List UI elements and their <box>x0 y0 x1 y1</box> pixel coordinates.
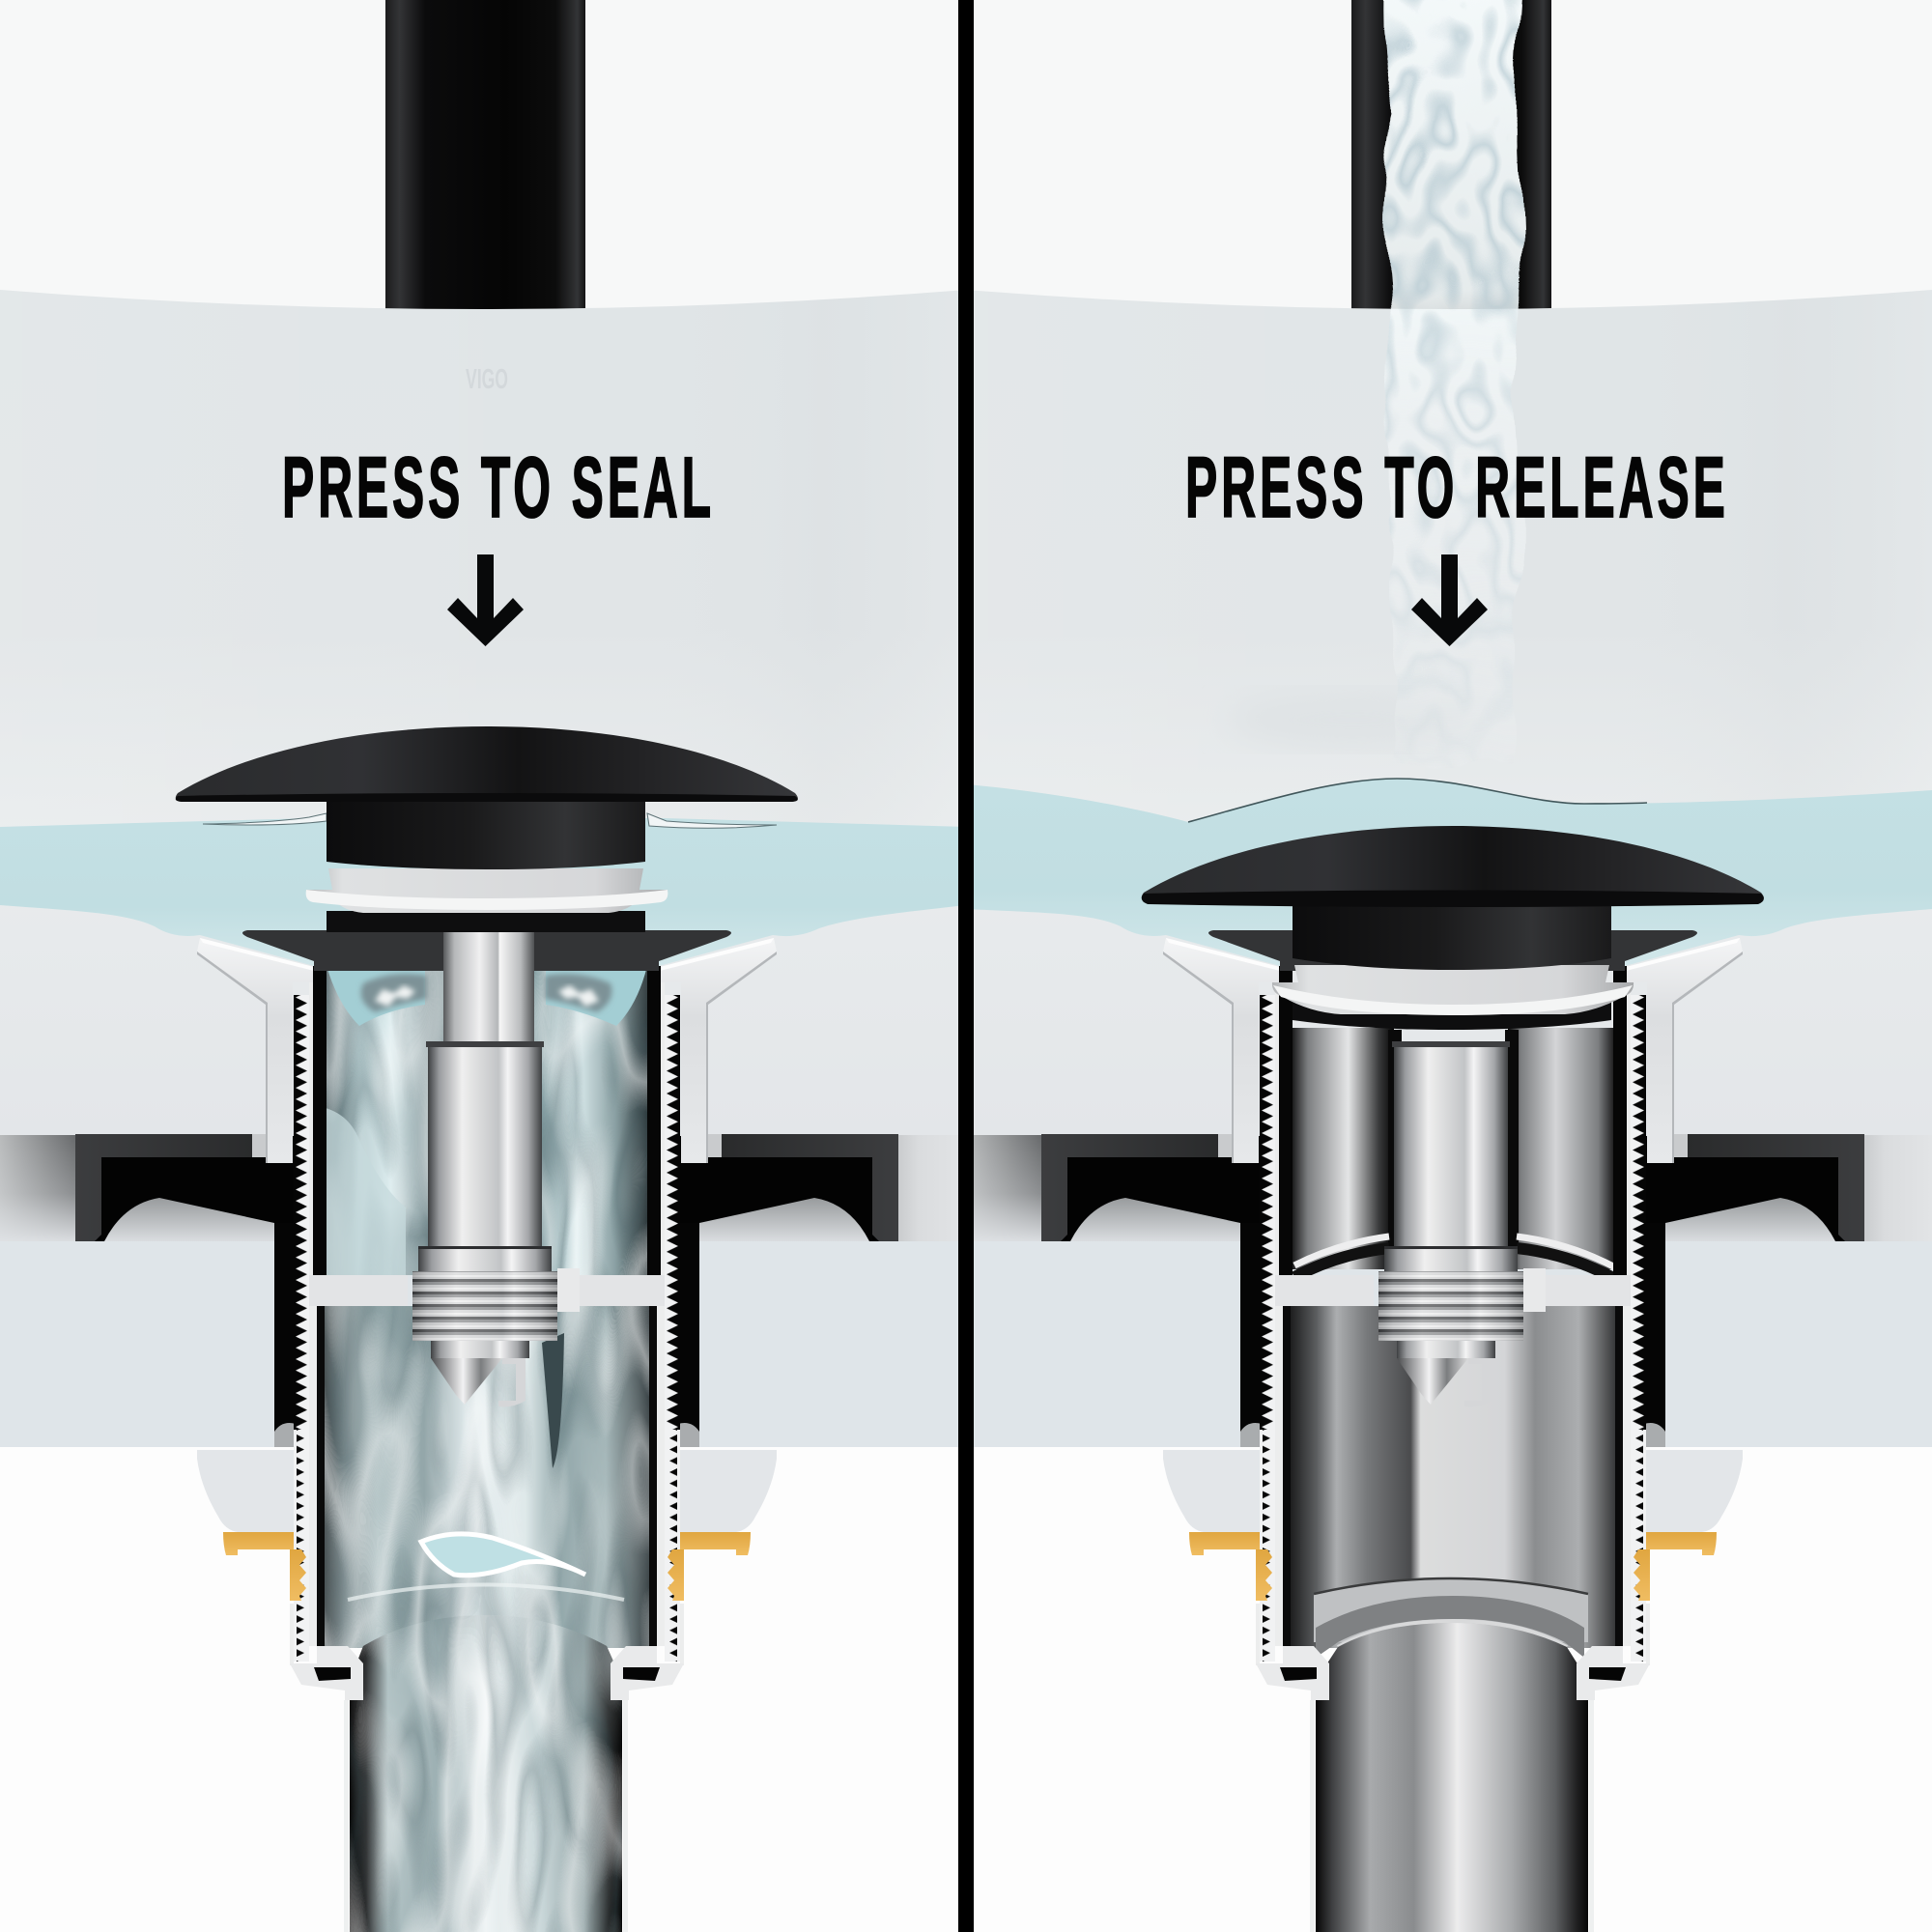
sleeve left <box>1388 1030 1402 1247</box>
pipe white outline left <box>1310 1700 1315 1932</box>
base white area <box>966 1447 1932 1932</box>
lower stem mechanism <box>412 1041 580 1406</box>
seal lip <box>306 890 668 910</box>
falling water stream <box>1381 0 1522 763</box>
foam left <box>375 985 415 1007</box>
heading: press to release: PRESS TO RELEASE <box>1185 440 1725 536</box>
background: upper white wall <box>0 0 966 309</box>
arrow: down to release <box>1411 554 1488 646</box>
counter band right <box>898 1135 958 1241</box>
housing right half <box>1532 938 1864 1700</box>
housing left half <box>75 938 408 1700</box>
upper chamber metal right <box>1508 1028 1614 1269</box>
panel: press to release (open drain) <box>966 0 1932 1932</box>
upper chamber metal left <box>1293 1028 1394 1269</box>
top chamber water highlight right <box>546 966 647 1026</box>
basin sheen <box>0 290 966 831</box>
pipe white outline right <box>623 1700 628 1932</box>
foam right <box>558 985 599 1007</box>
counter band left fade <box>966 1135 1043 1241</box>
rubber seal <box>306 868 668 913</box>
upper chamber draining water <box>327 966 647 1275</box>
lower chamber draining water <box>317 1306 653 1648</box>
upper stem rod <box>443 930 534 1044</box>
rubber seal <box>1272 965 1634 1014</box>
dark ring under seal <box>1293 995 1611 1030</box>
faucet pipe <box>385 0 585 319</box>
reducer ring band <box>1314 1578 1588 1642</box>
turbulent water patch <box>327 1109 406 1275</box>
stopper neck <box>1293 898 1611 970</box>
background: upper white wall <box>966 0 1932 309</box>
panel: press to seal (closed drain) <box>0 0 966 1932</box>
ledge left <box>1294 1236 1389 1265</box>
lower stem mechanism <box>1378 1041 1546 1406</box>
countertop lower block <box>966 1241 1932 1447</box>
pipe white outline left <box>344 1700 349 1932</box>
faucet pipe <box>1351 0 1551 319</box>
divider between panels <box>958 0 974 1932</box>
dark flange insert <box>242 930 731 971</box>
dark ring under seal <box>327 911 645 932</box>
cap rim <box>176 793 798 802</box>
water meniscus left <box>203 813 327 825</box>
water meniscus right <box>647 813 777 828</box>
reducer shoulder <box>1316 1596 1584 1658</box>
housing left half <box>1041 938 1374 1700</box>
swirl on the water <box>421 1534 585 1576</box>
ring lines in chamber <box>348 1584 624 1600</box>
counter band right <box>1860 1135 1932 1241</box>
heading: press to seal: PRESS TO SEAL <box>282 440 711 536</box>
ledge right <box>1517 1236 1615 1267</box>
reducer black rim <box>1338 1621 1567 1647</box>
reducer ring highlights <box>1314 1578 1588 1594</box>
pipe white outline right <box>1589 1700 1594 1932</box>
standing water <box>0 818 966 966</box>
soft splash shadow <box>1227 691 1478 749</box>
top chamber water highlight left <box>327 966 425 1026</box>
lower chamber metal <box>1283 1306 1619 1648</box>
dark flange insert <box>1208 930 1697 971</box>
brand mark: VIGO <box>466 364 508 395</box>
stopper neck <box>327 801 645 869</box>
ledge right shadow <box>1517 1248 1615 1279</box>
air pocket left <box>361 974 427 1012</box>
base white area <box>0 1447 966 1932</box>
counter band left <box>0 1135 77 1241</box>
ripple crest line <box>1188 779 1647 822</box>
arrow: down to seal <box>447 554 524 646</box>
cap rim <box>1142 891 1764 907</box>
ledge left shadow <box>1294 1248 1389 1277</box>
stopper cap <box>176 726 798 802</box>
counter band left <box>966 1135 1043 1241</box>
air pocket right <box>545 974 611 1012</box>
standing water with ripple <box>966 779 1932 966</box>
water crease <box>542 1333 564 1468</box>
sink basin <box>0 290 966 1136</box>
counter band left fade <box>0 1149 75 1241</box>
housing right half <box>566 938 898 1700</box>
drain pipe metal <box>1316 1623 1588 1932</box>
basin sheen <box>966 290 1932 831</box>
sink basin <box>966 290 1932 1136</box>
seal lip <box>1273 985 1633 1015</box>
stopper cap <box>1142 826 1764 901</box>
countertop lower block <box>0 1241 966 1447</box>
sleeve right <box>1505 1030 1519 1247</box>
drain pipe water <box>350 1615 622 1932</box>
